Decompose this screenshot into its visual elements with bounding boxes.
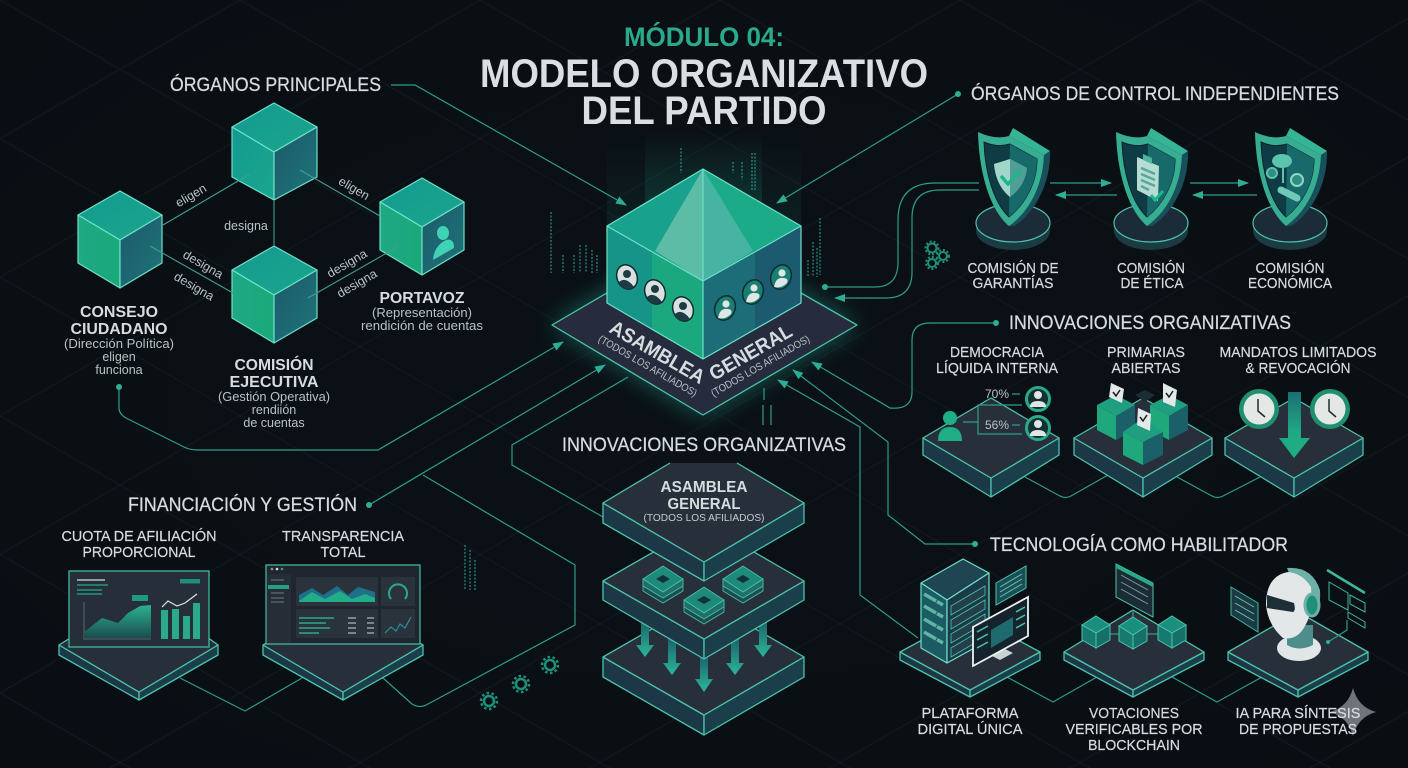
- heading: innovaciones organizativas (right): INNOVACIONES ORGANIZATIVAS: [1009, 313, 1291, 334]
- icon: liquid democracy delegation: 70%: [985, 387, 1009, 401]
- labels: commissions: ECONÓMICA: [1248, 275, 1332, 292]
- labels: innovaciones: PRIMARIAS: [1107, 345, 1185, 361]
- label: consejo ciudadano: (Dirección Política): [64, 337, 174, 351]
- label: comisión ejecutiva: [218, 355, 330, 430]
- shield: comisión económica: [1253, 128, 1327, 250]
- label: portavoz: [361, 290, 483, 333]
- relation labels: designa: [181, 248, 225, 282]
- relation labels: [172, 174, 379, 304]
- heading: innovaciones organizativas (center): INNOVACIONES ORGANIZATIVAS: [562, 435, 846, 456]
- icon: clocks and term arrow: [1239, 389, 1350, 458]
- heading: tecnología como habilitador: TECNOLOGÍA COMO HABILITADOR: [990, 535, 1288, 556]
- relation labels: eligen: [336, 174, 372, 203]
- label: consejo ciudadano: [64, 304, 174, 377]
- labels: commissions: COMISIÓN: [1256, 260, 1324, 277]
- platform: IA: [1228, 612, 1368, 697]
- label: portavoz: rendición de cuentas: [361, 319, 483, 333]
- modules on middle plate: [643, 566, 763, 624]
- relation lines: [150, 170, 399, 298]
- central element: asamblea general: [552, 130, 857, 415]
- panel: stacked plates: [603, 463, 804, 735]
- member avatars: [613, 262, 795, 324]
- top plate with text: GENERAL: [668, 496, 740, 513]
- bottom plate: [603, 599, 804, 735]
- label: comisión ejecutiva: (Gestión Operativa): [218, 390, 330, 404]
- labels: innovaciones: & REVOCACIÓN: [1246, 360, 1350, 377]
- label: comisión ejecutiva: rendiión: [252, 403, 296, 417]
- labels: commissions: COMISIÓN: [1117, 260, 1185, 277]
- labels: tecnología: [918, 705, 1360, 754]
- labels: tecnología: PLATAFORMA: [922, 706, 1019, 722]
- top plate with text: ASAMBLEA: [660, 479, 748, 496]
- label: consejo ciudadano: CIUDADANO: [70, 321, 168, 338]
- title: MODELO ORGANIZATIVO: [480, 52, 928, 96]
- platform: primarias: [1074, 398, 1212, 497]
- platform text: (TODOS LOS AFILIADOS): [709, 333, 812, 400]
- labels: innovaciones: DEMOCRACIA: [950, 345, 1044, 361]
- icon: server and monitor: [921, 559, 1028, 666]
- panel: financiación y gestión: [59, 528, 558, 709]
- double arrows between commissions: [1050, 183, 1257, 195]
- cube: top organ: [232, 103, 317, 200]
- label: portavoz: (Representación): [372, 306, 472, 320]
- icon: liquid democracy delegation: 56%: [985, 418, 1009, 432]
- panel: innovaciones organizativas: [923, 345, 1376, 497]
- title: DEL PARTIDO: [582, 89, 826, 133]
- label: comisión ejecutiva: de cuentas: [243, 416, 305, 430]
- icon: liquid democracy delegation: [938, 387, 1050, 441]
- relation labels: designa: [224, 219, 268, 233]
- middle plate: [603, 523, 804, 659]
- panel: órganos de control: [926, 128, 1332, 292]
- icon: gears: [926, 242, 949, 269]
- labels: PROPORCIONAL: [82, 545, 196, 561]
- labels: tecnología: BLOCKCHAIN: [1088, 738, 1180, 754]
- labels: commissions: [968, 260, 1332, 292]
- relation labels: designa: [172, 270, 216, 304]
- icon: ballot boxes: [1097, 383, 1188, 465]
- base platform: [552, 237, 857, 415]
- connector lines between sections and central assembly: [116, 85, 1262, 711]
- panel: órganos principales: [64, 103, 483, 430]
- labels: innovaciones: LÍQUIDA INTERNA: [936, 360, 1058, 377]
- label: consejo ciudadano: funciona: [95, 363, 143, 377]
- labels: innovaciones: [936, 345, 1376, 377]
- labels: tecnología: IA PARA SÍNTESIS: [1236, 705, 1360, 722]
- labels: innovaciones: ABIERTAS: [1112, 361, 1180, 377]
- label: consejo ciudadano: CONSEJO: [80, 304, 158, 321]
- label: comisión ejecutiva: COMISIÓN: [234, 355, 314, 374]
- labels: tecnología: VERIFICABLES POR: [1066, 722, 1202, 738]
- prism: [607, 169, 801, 359]
- icon: blockchain cubes: [1082, 564, 1186, 649]
- labels: innovaciones: MANDATOS LIMITADOS: [1220, 345, 1376, 361]
- labels: commissions: COMISIÓN DE: [968, 260, 1059, 277]
- labels: commissions: GARANTÍAS: [972, 275, 1054, 292]
- platform text: GENERAL: [706, 320, 796, 385]
- labels: tecnología: VOTACIONES: [1089, 706, 1179, 722]
- labels: tecnología: DIGITAL ÚNICA: [918, 721, 1023, 738]
- title: [480, 21, 928, 133]
- heading: órganos de control independientes: ÓRGANOS DE CONTROL INDEPENDIENTES: [971, 83, 1339, 105]
- relation labels: designa: [335, 267, 379, 301]
- icon: gears: [481, 657, 558, 709]
- label: portavoz: PORTAVOZ: [380, 290, 465, 307]
- labels: CUOTA DE AFILIACIÓN: [62, 528, 216, 545]
- platform text: [596, 317, 812, 400]
- shield: comisión de garantías: [976, 128, 1050, 250]
- glow beam above cube: [552, 130, 857, 415]
- watermark star: [1330, 688, 1376, 736]
- label: consejo ciudadano: eligen: [102, 350, 136, 364]
- labels: TOTAL: [320, 545, 366, 561]
- relation labels: designa: [325, 247, 369, 281]
- platform: blockchain: [1064, 610, 1204, 697]
- platform: mandatos: [1225, 398, 1363, 497]
- relation labels: eligen: [173, 181, 209, 210]
- labels: [62, 528, 404, 561]
- platform and screen: transparencia: [263, 565, 423, 700]
- cube: comisión ejecutiva: [232, 246, 317, 343]
- top plate with text: (TODOS LOS AFILIADOS): [644, 512, 764, 524]
- shield: comisión de ética: [1114, 128, 1188, 250]
- platform: democracia líquida: [923, 398, 1059, 497]
- platform text: ASAMBLEA: [606, 317, 708, 389]
- top plate with text: [603, 463, 804, 581]
- title: MÓDULO 04:: [624, 21, 784, 52]
- panel: tecnología: [900, 559, 1376, 754]
- label: comisión ejecutiva: EJECUTIVA: [230, 374, 319, 391]
- heading: financiación y gestión: FINANCIACIÓN Y GESTIÓN: [128, 494, 357, 516]
- decorative data columns: [465, 148, 820, 590]
- platform: plataforma digital: [900, 614, 1040, 697]
- icon: AI head: [1231, 568, 1365, 661]
- cube: portavoz with person icon: [380, 178, 464, 275]
- down arrows: [636, 620, 772, 692]
- platform and screen: cuota: [59, 571, 218, 700]
- labels: TRANSPARENCIA: [282, 529, 404, 545]
- cube: consejo ciudadano: [78, 191, 162, 288]
- platform text: (TODOS LOS AFILIADOS): [596, 333, 699, 400]
- heading: órganos principales: ÓRGANOS PRINCIPALES: [170, 74, 381, 96]
- labels: commissions: DE ÉTICA: [1120, 275, 1184, 292]
- labels: tecnología: DE PROPUESTAS: [1239, 722, 1357, 738]
